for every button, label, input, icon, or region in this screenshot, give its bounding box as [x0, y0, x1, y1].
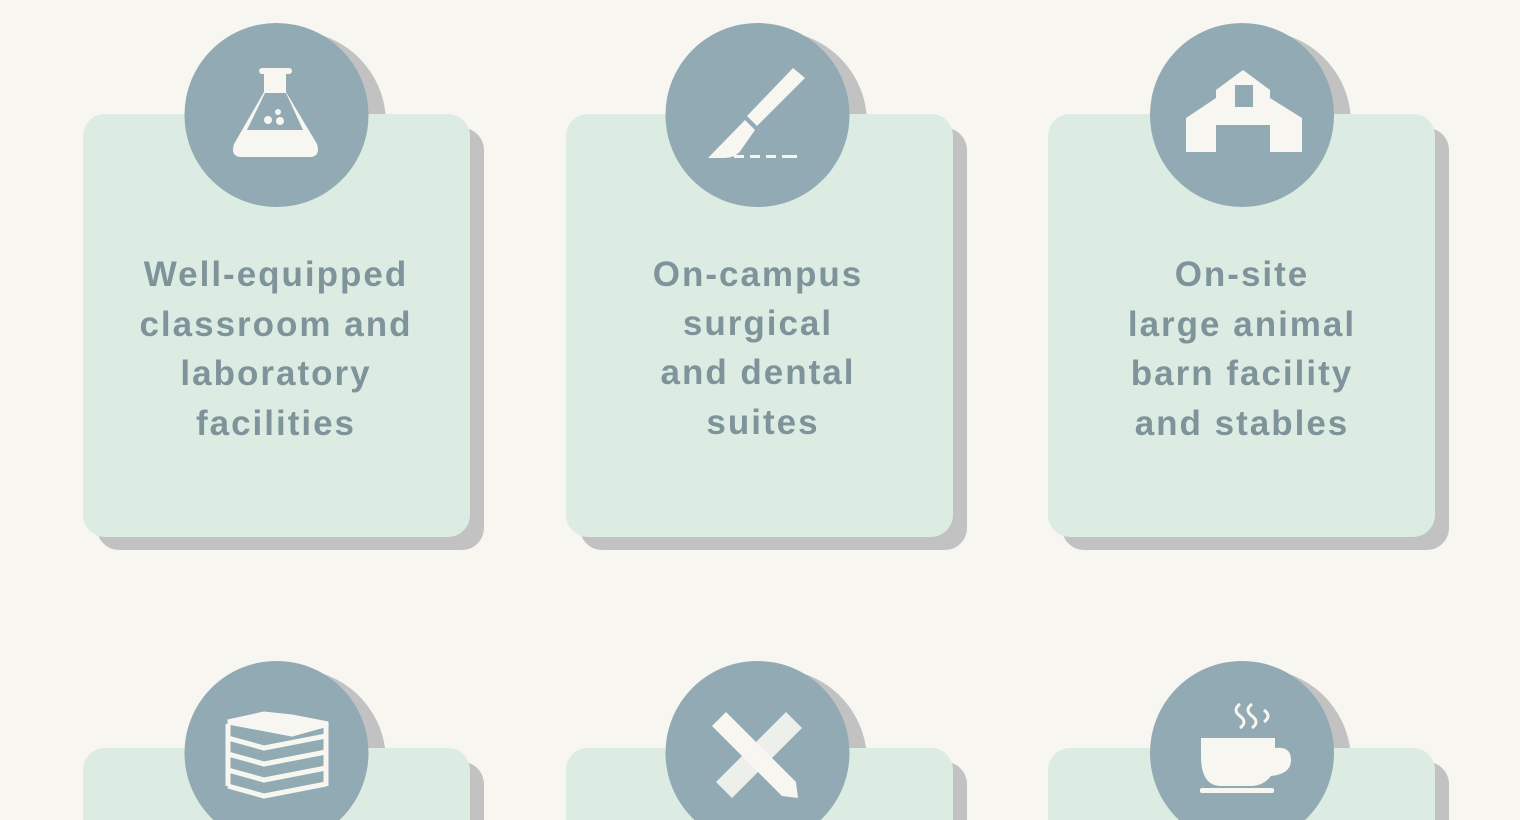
panel: lounge (row 2) [1048, 661, 1449, 820]
panel: classroom facilities [83, 23, 484, 550]
text: classroom: laboratory [180, 354, 372, 393]
panel: barn facility [1048, 23, 1449, 550]
text: barn: large animal [1128, 305, 1356, 344]
text: surgical: and dental [660, 353, 856, 392]
text: surgical: suites [706, 403, 820, 442]
icon: coffee cup [1200, 704, 1291, 793]
text: surgical: surgical [683, 304, 833, 343]
icon: flask [233, 68, 318, 157]
text: classroom [139, 255, 413, 443]
icon: books [228, 714, 328, 796]
text: surgical: On-campus [653, 255, 863, 294]
text: classroom: Well-equipped [144, 255, 408, 294]
panel: library (row 2) [83, 661, 484, 820]
text: classroom: classroom and [139, 305, 413, 344]
icon: scalpel [708, 68, 805, 158]
panel: surgical suites [566, 23, 967, 550]
text: surgical [653, 255, 863, 442]
icon: pencil and ruler [712, 712, 802, 798]
text: barn [1128, 255, 1356, 443]
panel: art supplies (row 2) [566, 661, 967, 820]
text: classroom: facilities [196, 404, 356, 443]
text: barn: On-site [1175, 255, 1309, 294]
text: barn: and stables [1135, 404, 1349, 443]
icon: barn [1186, 70, 1302, 152]
text: barn: barn facility [1131, 354, 1353, 393]
